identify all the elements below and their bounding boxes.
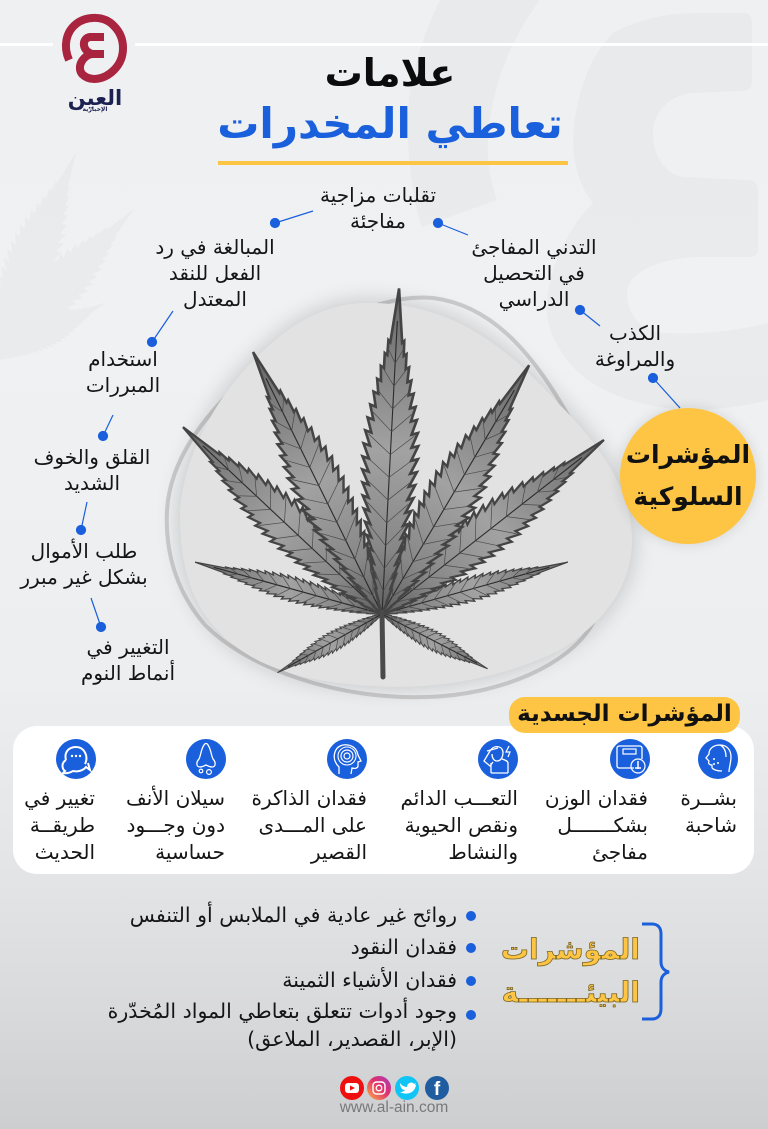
social icons: f — [434, 1079, 441, 1100]
icon: fatigue — [478, 739, 518, 779]
behavioral indicator: overreaction: الفعل للنقد — [169, 261, 261, 285]
physical indicator: weight loss — [545, 786, 648, 864]
behavioral indicator: anxiety: الشديد — [64, 471, 120, 495]
behavioral indicator: sleep — [81, 635, 175, 685]
title: علامات — [325, 51, 455, 95]
behavioral indicators badge — [620, 408, 756, 544]
icon: nose — [186, 739, 226, 779]
physical indicator: memory loss: القصير — [311, 840, 367, 864]
physical indicator: weight loss: مفاجئ — [592, 840, 648, 864]
behavioral indicators badge: السلوكية — [633, 482, 743, 511]
behavioral indicator: lying: والمراوغة — [595, 347, 675, 371]
physical indicator: weight loss: فقدان الوزن — [545, 786, 648, 810]
connector lines and dots — [76, 211, 680, 632]
behavioral indicator: sleep: أنماط النوم — [81, 661, 175, 685]
physical indicator: pale skin: شاحبة — [685, 813, 737, 837]
physical indicator: speech change: طريقــة — [30, 813, 95, 837]
physical indicator: fatigue: ونقص الحيوية — [405, 813, 518, 837]
physical indicator: pale skin: بشــرة — [680, 786, 737, 810]
physical indicator: speech change — [24, 786, 95, 864]
behavioral indicator: overreaction — [155, 235, 275, 311]
behavioral indicator: academic decline: التدني المفاجئ — [471, 235, 597, 259]
environmental list: روائح غير عادية في الملابس أو التنفس — [130, 903, 457, 927]
physical indicator: fatigue: التعـــب الدائم — [400, 786, 518, 810]
title: تعاطي المخدرات — [217, 99, 563, 148]
behavioral indicator: mood changes — [320, 183, 436, 233]
physical indicator: memory loss: على المـــدى — [258, 813, 367, 837]
behavioral indicator: anxiety: القلق والخوف — [34, 445, 150, 469]
cannabis leaf — [167, 287, 618, 682]
environmental indicators heading: البيئـــــــة — [502, 976, 640, 1009]
environmental list: فقدان النقود — [351, 935, 457, 959]
behavioral indicator: lying: الكذب — [609, 321, 661, 345]
behavioral indicator: mood changes: مفاجئة — [350, 209, 406, 233]
behavioral indicator: asking for money: طلب الأموال — [31, 539, 137, 563]
behavioral indicator: mood changes: تقلبات مزاجية — [320, 183, 436, 207]
header rule — [0, 43, 768, 46]
logo — [62, 14, 127, 113]
list bullets — [466, 911, 476, 1020]
behavioral indicator: excuses: استخدام — [88, 347, 158, 371]
physical indicator: fatigue: والنشاط — [448, 840, 518, 864]
physical indicator: pale skin — [680, 786, 737, 837]
title — [217, 51, 563, 148]
physical indicators heading — [509, 697, 740, 733]
stem — [382, 612, 383, 677]
behavioral indicators badge: المؤشرات — [626, 440, 750, 469]
physical indicator: runny nose: سيلان الأنف — [126, 786, 225, 810]
behavioral indicator: overreaction: المعتدل — [183, 287, 247, 311]
physical indicator: weight loss: بشكـــــــل — [557, 813, 648, 837]
environmental list — [108, 902, 457, 1051]
icon: skin — [698, 739, 738, 779]
panel: physical indicators — [13, 726, 754, 874]
physical indicator: speech change: الحديث — [35, 840, 95, 864]
behavioral indicator: sleep: التغيير في — [86, 635, 170, 659]
environmental list: (الإبر، القصدير، الملاعق) — [247, 1027, 457, 1051]
environmental indicators heading: المؤشرات — [501, 933, 640, 966]
behavioral indicator: academic decline: الدراسي — [499, 287, 569, 311]
physical indicator: runny nose — [126, 786, 225, 864]
physical indicator: runny nose: حساسية — [155, 840, 225, 864]
physical indicator: memory loss — [251, 786, 367, 864]
website: www.al-ain.com — [340, 1099, 448, 1116]
icon: scale — [610, 739, 650, 779]
behavioral indicator: excuses: المبررات — [86, 373, 160, 397]
behavioral indicator: lying — [595, 321, 675, 371]
environmental list: وجود أدوات تتعلق بتعاطي المواد المُخدّرة — [108, 999, 457, 1023]
physical indicator: runny nose: دون وجـــود — [127, 813, 225, 837]
physical indicator: memory loss: فقدان الذاكرة — [251, 786, 367, 810]
background watermark — [0, 0, 768, 410]
environmental indicators heading — [501, 933, 640, 1009]
behavioral indicator: asking for money — [20, 538, 148, 589]
behavioral indicator: anxiety — [34, 445, 150, 495]
behavioral indicator: asking for money: بشكل غير مبرر — [20, 565, 148, 589]
icon: speech bubbles — [56, 739, 96, 779]
physical indicators heading: المؤشرات الجسدية — [517, 701, 732, 727]
environmental list: فقدان الأشياء الثمينة — [282, 968, 457, 992]
logo: الإخبارية — [83, 106, 107, 113]
physical indicator: speech change: تغيير في — [24, 786, 95, 810]
title underline — [218, 161, 568, 165]
behavioral indicator: academic decline: في التحصيل — [483, 261, 585, 285]
blob backdrop — [167, 297, 632, 697]
icon: memory head — [327, 739, 367, 779]
behavioral indicator: excuses — [86, 347, 160, 397]
physical indicator: fatigue — [400, 786, 518, 864]
behavioral indicator: overreaction: المبالغة في رد — [155, 235, 275, 259]
logo: العين — [68, 86, 122, 110]
behavioral indicator: academic decline — [471, 235, 597, 311]
